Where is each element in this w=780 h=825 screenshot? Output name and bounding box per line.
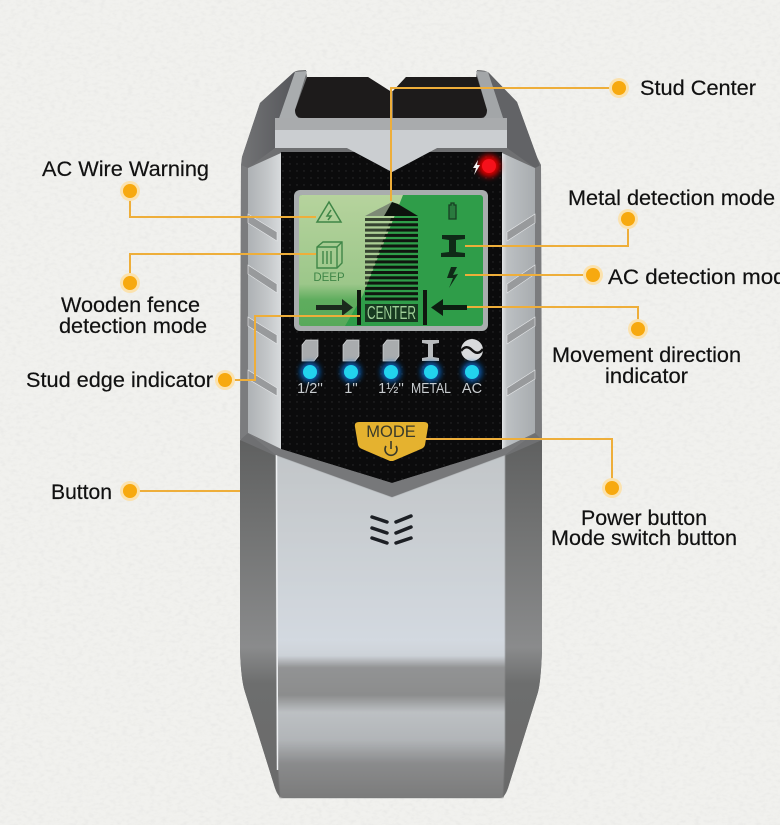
mode button: MODE — [366, 423, 416, 441]
icon: left arrow — [431, 299, 467, 316]
black face plate — [281, 152, 502, 483]
icon: warning triangle — [317, 202, 341, 222]
icon: I-beam — [441, 235, 465, 257]
callout: Wooden fence detection mode — [59, 254, 316, 338]
chevron below face — [248, 433, 535, 497]
red warning LED — [473, 155, 500, 177]
outer shell — [240, 70, 542, 798]
tower bar graph — [365, 202, 418, 300]
center bars and label — [357, 290, 427, 325]
callout: Button — [51, 480, 240, 504]
callout: Stud Center — [391, 76, 756, 201]
indicator row — [297, 339, 483, 397]
indicator labels: AC — [462, 381, 482, 397]
device: stud finder body — [240, 70, 542, 798]
callout: AC Wire Warning — [42, 157, 316, 217]
indicator labels: METAL — [411, 381, 451, 397]
front lower panel — [276, 455, 505, 798]
callout: Movement direction indicator: Movement direction — [552, 343, 741, 367]
icon: lightning bolt — [447, 267, 458, 288]
callout: Metal detection mode: Metal detection mode — [568, 186, 775, 210]
left side panel — [248, 153, 281, 449]
upper right shoulder — [488, 72, 541, 172]
callout: Movement direction indicator — [467, 307, 741, 388]
front panel edge highlight — [276, 455, 278, 770]
horn highlights — [275, 71, 307, 130]
callout: Button: Button — [51, 480, 112, 504]
callout: AC Wire Warning: AC Wire Warning — [42, 157, 209, 181]
icon: wood block DEEP — [313, 242, 345, 284]
callout: Power button / Mode switch button — [425, 439, 737, 550]
outer side strips — [240, 165, 542, 440]
callout: AC detection mode — [465, 265, 780, 289]
lower right side — [503, 440, 542, 798]
LED indicators — [300, 362, 482, 382]
icon: AC wave — [461, 339, 483, 361]
callout: Wooden fence detection mode: Wooden fence — [61, 293, 200, 317]
top sensor left — [295, 77, 390, 118]
center bars and label: CENTER — [367, 303, 416, 323]
icon: wood block DEEP: DEEP — [313, 272, 345, 284]
indicator labels: 1/2'' — [297, 381, 323, 397]
callout: Wooden fence detection mode: detection mode — [59, 314, 207, 338]
right side panel — [502, 153, 535, 449]
callout: Stud Center: Stud Center — [640, 76, 756, 100]
callout: Metal detection mode — [465, 186, 775, 246]
callout: Power button / Mode switch button: Power button — [581, 506, 707, 530]
LCD screen — [294, 190, 488, 331]
icon: right arrow — [316, 299, 353, 316]
upper left shoulder — [241, 72, 296, 172]
callout: Stud edge indicator — [26, 316, 360, 392]
icon: battery — [449, 203, 456, 219]
callout: Stud edge indicator: Stud edge indicator — [26, 368, 213, 392]
silver top band — [275, 118, 507, 172]
lower left side — [240, 440, 280, 798]
indicator labels — [297, 381, 482, 397]
mode button — [355, 422, 428, 461]
callout: Power button / Mode switch button: Mode switch button — [551, 526, 737, 550]
side notches — [248, 214, 535, 396]
icon: metal beam — [422, 340, 439, 361]
callout: Movement direction indicator: indicator — [605, 364, 688, 388]
indicator labels: 1'' — [344, 381, 358, 397]
icon: wood blocks — [302, 340, 399, 361]
speaker slits — [372, 516, 411, 543]
indicator labels: 1½'' — [378, 381, 404, 397]
top sensor right — [393, 77, 487, 118]
